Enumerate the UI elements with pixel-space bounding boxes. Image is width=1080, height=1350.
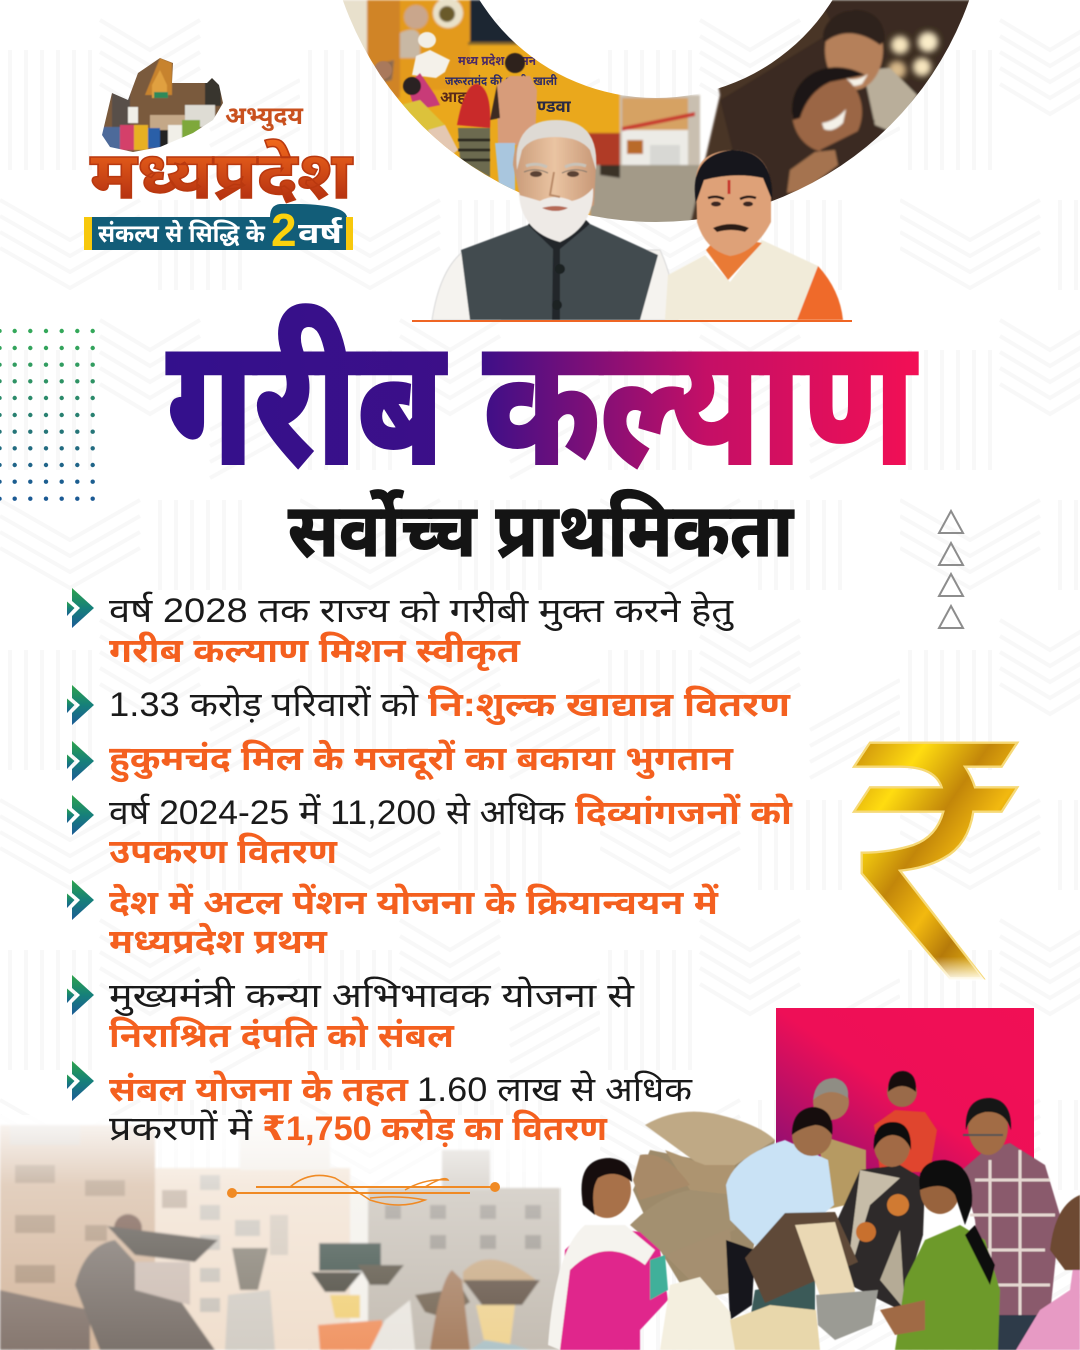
icon: bullet 6: [67, 975, 94, 1015]
logo state name: मध्यप्रदेश: [90, 138, 354, 212]
list item 1: वर्ष 2028 तक राज्य को गरीबी मुक्त करने हेतु: [109, 591, 734, 631]
subtitle: सर्वोच्च प्राथमिकता: [288, 489, 794, 572]
list item 6: [67, 975, 635, 1055]
list item 7: 1.60 लाख से अधिक: [417, 1070, 693, 1109]
food distribution photo: [548, 1071, 1080, 1350]
food truck signage text: जरूरतमंद की थाली, खाली: [445, 73, 557, 88]
list item 5: मध्यप्रदेश प्रथम: [109, 922, 328, 961]
list item 4: [67, 793, 793, 871]
logo banner: संकल्प से सिद्धि के: [98, 219, 266, 248]
list item 2: [67, 685, 791, 726]
man with checked shirt: [962, 1098, 1060, 1350]
dot pattern: [0, 329, 95, 501]
icon: bullet 7: [67, 1061, 94, 1101]
list item 2: 1.33 करोड़ परिवारों को: [109, 685, 419, 724]
logo small heading: अभ्युदय: [225, 102, 304, 131]
logo banner: वर्ष: [298, 217, 343, 250]
sacks: [630, 1112, 775, 1300]
steel bowl: [816, 1290, 878, 1340]
list item 2: नि:शुल्क खाद्यान्न वितरण: [428, 686, 791, 726]
food truck signage text: मध्य प्रदेश शासन: [458, 53, 537, 68]
woman in green saree: [880, 1160, 1000, 1350]
icon: gold rupee: [854, 743, 1017, 983]
list item 7: [67, 1061, 693, 1148]
icon: bullet 3: [67, 741, 94, 781]
woman at right edge: [1016, 1195, 1080, 1350]
pink panel: [776, 1008, 1034, 1188]
portrait: chief minister: [665, 150, 843, 320]
list item 7: प्रकरणों में: [109, 1109, 253, 1148]
woman in pink: [548, 1158, 668, 1350]
list item 7: संबल योजना के तहत: [109, 1070, 409, 1109]
list item 6: मुख्यमंत्री कन्या अभिभावक योजना से: [109, 976, 635, 1016]
icon: bullet 1: [67, 588, 94, 628]
list item 4: उपकरण वितरण: [109, 833, 338, 871]
list item 5: [67, 880, 719, 961]
logo: abhyudaya madhya pradesh: [84, 55, 354, 256]
list item 4: वर्ष 2024-25 में 11,200 से अधिक: [109, 793, 566, 832]
list item 3: हुकुमचंद मिल के मजदूरों का बकाया भुगतान: [109, 739, 734, 783]
logo map collage: [100, 55, 225, 155]
food truck signage text: आहार: [440, 89, 477, 106]
white bag and grain sack: [660, 1277, 820, 1350]
photo collage ring: [320, 0, 980, 230]
divider under portraits: [412, 320, 852, 322]
logo banner: [84, 204, 353, 256]
icon: triangles: [939, 511, 963, 628]
food truck signage text: ण्डवा: [537, 97, 572, 116]
list item 7: ₹1,750 करोड़ का वितरण: [262, 1110, 608, 1148]
icon: bullet 5: [67, 880, 94, 920]
icon: bullet 4: [67, 795, 94, 835]
icon: bullet 2: [67, 685, 94, 725]
tipping tray: [745, 1212, 858, 1310]
ornament divider: [227, 1175, 500, 1205]
list item 1: गरीब कल्याण मिशन स्वीकृत: [109, 632, 521, 672]
title: गरीब कल्याण: [167, 305, 918, 501]
list item 6: निराश्रित दंपति को संबल: [109, 1017, 455, 1055]
logo banner: 2: [271, 204, 297, 256]
list item 1: [67, 588, 734, 672]
list item 5: देश में अटल पेंशन योजना के क्रियान्वयन में: [109, 883, 719, 922]
list item 4: दिव्यांगजनों को: [575, 793, 793, 832]
construction workers photo: [0, 1115, 560, 1350]
food truck signage text: [440, 53, 572, 116]
portrait: prime minister: [432, 120, 678, 320]
woman in red: [874, 1071, 937, 1172]
man at back: [813, 1078, 866, 1210]
woman in checked saree: [835, 1122, 925, 1310]
man in blue shirt: [726, 1107, 834, 1320]
